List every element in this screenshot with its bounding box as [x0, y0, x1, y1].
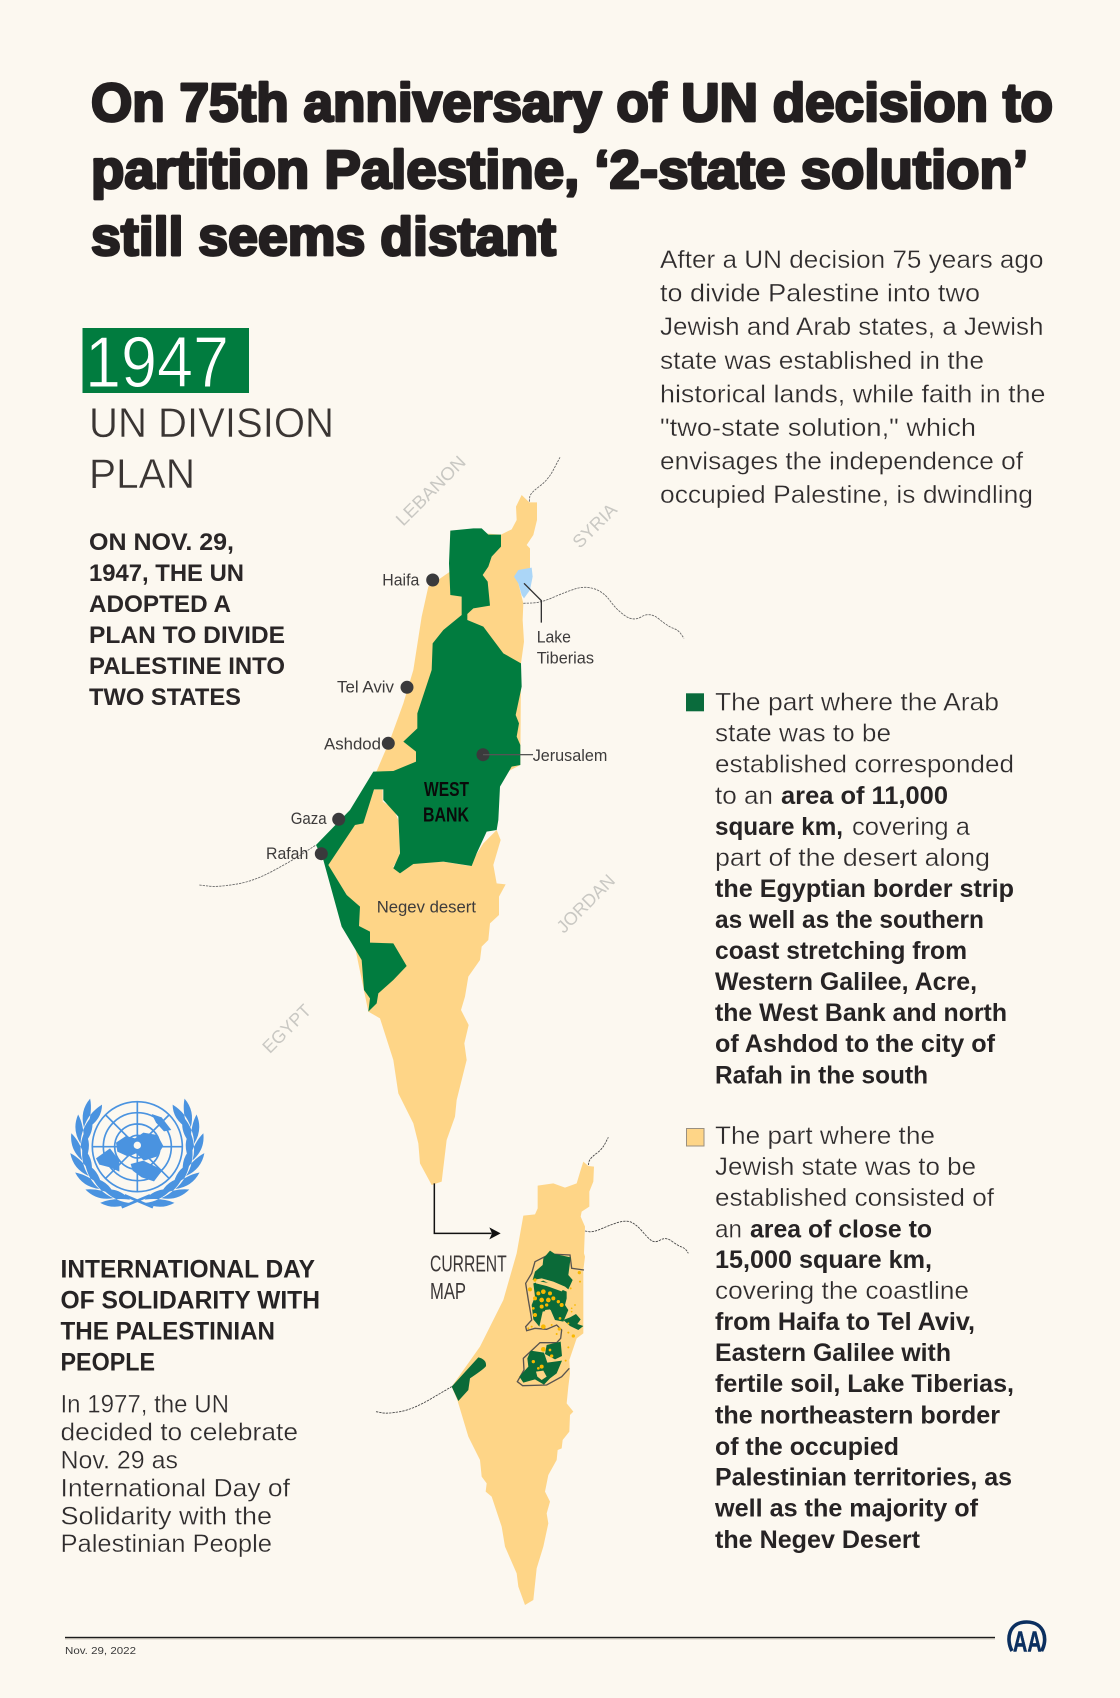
arrow to current map	[434, 1183, 501, 1239]
legend text: Arab state: established corresponded	[715, 751, 1014, 779]
country labels: LEBANON	[392, 452, 470, 530]
label: current map	[430, 1251, 507, 1304]
subheading: International Day: THE PALESTINIAN	[60, 1318, 275, 1346]
icon: UN emblem	[69, 1098, 206, 1210]
legend text: Jewish state: Jewish state was to be	[715, 1153, 976, 1181]
emblem laurel right	[143, 1098, 206, 1210]
year badge 1947: 1947	[85, 323, 229, 403]
subheading: plan summary	[89, 529, 285, 711]
legend text: Jewish state: of the occupied	[715, 1433, 899, 1461]
legend text: Arab state: square km,	[715, 813, 843, 841]
label: current map: MAP	[430, 1278, 466, 1304]
subheading: plan summary: PALESTINE INTO	[89, 653, 285, 680]
city and feature labels: Tiberias	[537, 648, 594, 667]
legend text: Arab state: coast stretching from	[715, 937, 967, 965]
footer rule	[65, 1637, 995, 1639]
subheading: International Day: PEOPLE	[60, 1348, 155, 1376]
legend text: Jewish state: 15,000 square km,	[715, 1246, 932, 1274]
text block: International Day description: In 1977, the UN	[60, 1391, 229, 1419]
map: current situation	[376, 1137, 688, 1605]
title: partition Palestine, ‘2-state solution’	[91, 140, 1028, 200]
city and feature labels: Negev desert	[377, 898, 476, 917]
intro paragraph: historical lands, while faith in the	[660, 380, 1046, 408]
text block: International Day description: Solidarity with the	[60, 1502, 272, 1530]
country labels: SYRIA	[569, 500, 621, 552]
logo: Anadolu Agency	[1009, 1622, 1045, 1659]
legend text: Arab state: as well as the southern	[715, 906, 984, 934]
text block: International Day description: Palestinian People	[60, 1530, 272, 1558]
map line: West Bank boundary	[517, 1254, 584, 1386]
legend: Arab state	[686, 689, 1014, 1090]
legend text: Arab state: covering a	[852, 813, 970, 841]
map land: Arab state area	[316, 528, 522, 1012]
map land: Jewish state area north	[373, 495, 537, 807]
intro paragraph: to divide Palestine into two	[660, 280, 980, 308]
legend swatch: green	[686, 693, 704, 711]
subheading: International Day	[60, 1256, 320, 1376]
intro paragraph: occupied Palestine, is dwindling	[660, 481, 1033, 509]
map feature: Lake Tiberias	[514, 568, 533, 598]
emblem continents	[96, 1114, 171, 1181]
legend text: Jewish state: area of close to	[750, 1215, 932, 1243]
subheading: plan summary: ON NOV. 29,	[89, 529, 234, 556]
border lines	[376, 1137, 688, 1413]
legend text: Arab state: area of 11,000	[781, 782, 948, 810]
intro paragraph: envisages the independence of	[660, 448, 1023, 476]
legend text: Arab state: to an	[715, 782, 773, 810]
subheading: plan summary: TWO STATES	[89, 684, 241, 711]
intro paragraph	[660, 246, 1046, 509]
label: West Bank	[423, 779, 469, 827]
footer date: Nov. 29, 2022	[65, 1645, 136, 1657]
legend text: Arab state: state was to be	[715, 720, 891, 748]
leader: Lake Tiberias	[524, 583, 541, 623]
map: 1947 UN partition plan	[199, 452, 684, 1185]
subheading: plan summary: 1947, THE UN	[89, 560, 244, 587]
map land: current outline	[452, 1162, 594, 1605]
legend text: Jewish state: the Negev Desert	[715, 1526, 921, 1554]
border lines	[199, 457, 684, 886]
heading: UN division plan: PLAN	[89, 450, 195, 497]
country labels: JORDAN	[553, 871, 619, 937]
city and feature labels: Lake	[537, 628, 571, 647]
subheading: plan summary: PLAN TO DIVIDE	[89, 622, 285, 649]
legend text: Jewish state: Eastern Galilee with	[715, 1339, 951, 1367]
emblem laurel left	[69, 1098, 131, 1210]
legend: Jewish state	[686, 1122, 1014, 1554]
legend text: Jewish state: from Haifa to Tel Aviv,	[715, 1308, 975, 1336]
label: current map: CURRENT	[430, 1251, 507, 1277]
logo: Anadolu Agency: AA	[1013, 1627, 1042, 1659]
city and feature labels: Haifa	[382, 571, 420, 590]
city and feature labels	[266, 571, 607, 917]
map area: West Bank Palestinian enclaves	[519, 1251, 583, 1385]
label: West Bank: WEST	[424, 779, 469, 801]
title: On 75th anniversary of UN decision to	[91, 73, 1053, 133]
subheading: International Day: OF SOLIDARITY WITH	[60, 1286, 320, 1314]
title: still seems distant	[91, 207, 556, 267]
legend text: Jewish state: The part where the	[715, 1122, 935, 1150]
legend text: Jewish state: established consisted of	[715, 1184, 994, 1212]
legend text: Arab state: Western Galilee, Acre,	[715, 968, 977, 996]
intro paragraph: state was established in the	[660, 347, 984, 375]
subheading: International Day: INTERNATIONAL DAY	[60, 1256, 315, 1284]
legend text: Arab state: the Egyptian border strip	[715, 875, 1014, 903]
city and feature labels: Tel Aviv	[337, 678, 394, 697]
legend text: Arab state: Rafah in the south	[715, 1062, 928, 1090]
legend text: Jewish state: the northeastern border	[715, 1402, 1000, 1430]
map area: Gaza Strip	[452, 1357, 486, 1401]
emblem stems	[122, 1195, 153, 1207]
legend text: Arab state: the West Bank and north	[715, 999, 1007, 1027]
legend text: Jewish state: an	[715, 1215, 742, 1243]
legend text: Jewish state: Palestinian territories, as	[715, 1464, 1012, 1492]
legend text: Arab state: of Ashdod to the city of	[715, 1030, 996, 1058]
city and feature labels: Rafah	[266, 844, 308, 863]
intro paragraph: Jewish and Arab states, a Jewish	[660, 313, 1044, 341]
text block: International Day description: Nov. 29 as	[60, 1447, 178, 1475]
intro paragraph: "two-state solution," which	[660, 414, 976, 442]
legend swatch: yellow	[686, 1128, 704, 1146]
city and feature labels: Jerusalem	[533, 746, 607, 765]
country labels: EGYPT	[258, 1000, 315, 1057]
subheading: plan summary: ADOPTED A	[89, 591, 231, 618]
label: West Bank: BANK	[423, 805, 469, 827]
intro paragraph: After a UN decision 75 years ago	[660, 246, 1044, 274]
heading: UN division plan	[89, 399, 334, 497]
heading: UN division plan: UN DIVISION	[89, 399, 334, 446]
map land: Jewish state area south	[323, 789, 506, 1185]
legend text: Jewish state: well as the majority of	[714, 1495, 979, 1523]
legend text: Arab state: part of the desert along	[715, 844, 990, 872]
legend text: Arab state	[715, 689, 1014, 1090]
text block: International Day description: decided to celebrate	[60, 1419, 298, 1447]
text block: International Day description	[60, 1391, 298, 1558]
city markers	[315, 574, 533, 860]
city and feature labels: Gaza	[291, 809, 327, 828]
legend text: Jewish state: fertile soil, Lake Tiberias,	[715, 1370, 1014, 1398]
country labels	[258, 452, 621, 1057]
title	[91, 73, 1053, 267]
text block: International Day description: International Day of	[60, 1475, 290, 1503]
city and feature labels: Ashdod	[324, 734, 381, 753]
legend text: Jewish state	[714, 1122, 1014, 1554]
legend text: Arab state: The part where the Arab	[715, 689, 999, 717]
emblem globe	[92, 1102, 182, 1192]
legend text: Jewish state: covering the coastline	[715, 1277, 969, 1305]
